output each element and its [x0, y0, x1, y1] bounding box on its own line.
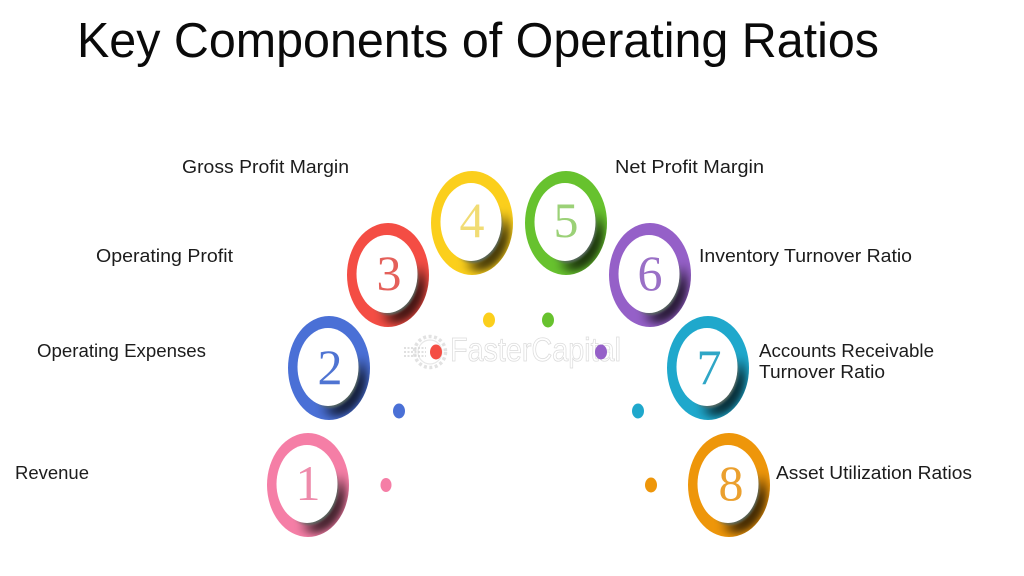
dots	[380, 312, 657, 492]
ring 2	[288, 316, 370, 420]
label: Asset Utilization Ratios: Asset Utilization Ratios	[776, 463, 972, 483]
ring 8: 8	[718, 455, 744, 511]
ring 3	[347, 223, 429, 327]
ring 3: 3	[376, 245, 402, 301]
ring 1: 1	[296, 455, 320, 511]
ring 7	[667, 316, 749, 420]
ring 4	[431, 171, 513, 275]
label: Inventory Turnover Ratio: Inventory Turnover Ratio	[699, 246, 912, 266]
label: Accounts Receivable Turnover Ratio: Turnover Ratio	[759, 362, 885, 382]
ring 8	[688, 433, 770, 537]
label: Accounts Receivable Turnover Ratio: Accounts Receivable	[759, 341, 934, 361]
title: Key Components of Operating Ratios	[77, 14, 879, 68]
label: Revenue: Revenue	[15, 463, 89, 483]
label: Accounts Receivable Turnover Ratio	[759, 341, 934, 382]
watermark: FasterCapital logo: FasterCapital	[450, 331, 621, 368]
ring 5	[525, 171, 607, 275]
ring 4: 4	[460, 192, 484, 248]
label: Operating Profit: Operating Profit	[96, 246, 233, 266]
ring 1	[267, 433, 349, 537]
ring 6	[609, 223, 691, 327]
ring 2: 2	[318, 339, 342, 395]
label: Net Profit Margin: Net Profit Margin	[615, 157, 764, 177]
label: Gross Profit Margin: Gross Profit Margin	[182, 157, 349, 177]
ring 7: 7	[696, 339, 722, 395]
ring 5: 5	[554, 192, 578, 248]
label: Operating Expenses: Operating Expenses	[37, 341, 206, 361]
ring 6: 6	[638, 245, 662, 301]
